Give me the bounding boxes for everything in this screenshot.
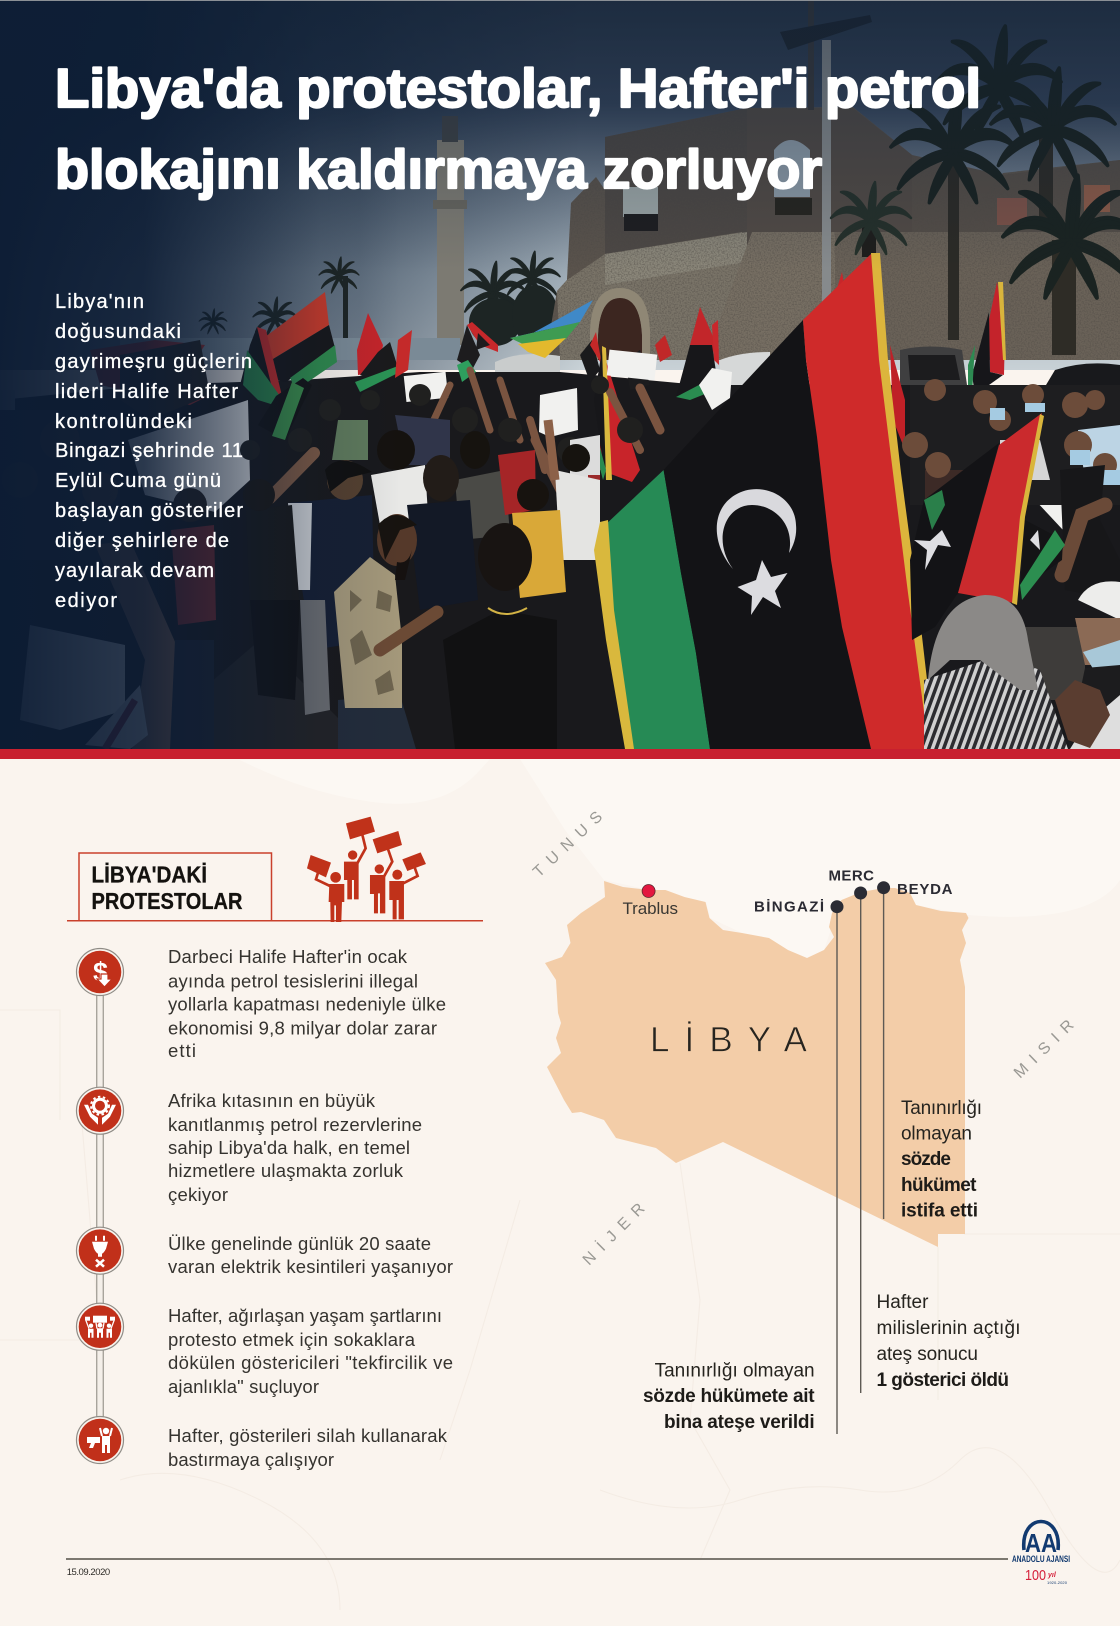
footer line — [66, 1558, 1008, 1560]
icon: small protesters — [76, 1303, 124, 1350]
city: Trablus: Trablus — [622, 899, 678, 918]
hero photo: protest in Tripoli — [0, 0, 1120, 749]
flag black band — [664, 320, 871, 749]
gray shirt man — [455, 470, 510, 540]
list item 1: oil closure loss: yollarla kapatması nedeniyle ülke — [168, 994, 446, 1014]
callout: government resigned: sözde — [901, 1149, 951, 1170]
black shirt small — [246, 505, 300, 610]
list item 3: power cuts: Ülke genelinde günlük 20 saate — [168, 1233, 431, 1254]
section heading: Libya'daki protestolar: LİBYA'DAKİ — [92, 862, 207, 888]
callout: building set on fire: sözde hükümete ait — [643, 1386, 815, 1407]
callout: one protester died: 1 gösterici öldü — [876, 1370, 1009, 1391]
icon: gun and person — [76, 1416, 124, 1464]
rear red flag corner — [830, 272, 850, 330]
camo man — [338, 695, 416, 749]
background flags, left group — [90, 292, 337, 440]
label: Libya: LİBYA — [650, 1021, 808, 1060]
main libyan flag — [594, 253, 935, 749]
section heading: Libya'daki protestolar: PROTESTOLAR — [92, 888, 243, 914]
list item 4: accusations: ajanlıkla" suçluyor — [168, 1376, 319, 1397]
section heading: Libya'daki protestolar — [67, 853, 483, 921]
list item 2: oil reserves: kanıtlanmış petrol rezervlerine — [168, 1114, 422, 1135]
lead paragraph: diğer şehirlere de — [55, 530, 229, 552]
lead paragraph: yayılarak devam — [55, 560, 214, 582]
icon: dollar falling — [76, 948, 124, 996]
icon: plug — [76, 1227, 124, 1274]
pointer line: Beyda: BEYDA — [897, 881, 953, 898]
cars — [495, 346, 1120, 395]
callout: government resigned: hükümet — [901, 1175, 977, 1196]
list item 3: power cuts: varan elektrik kesintileri yaşanıyor — [168, 1256, 453, 1277]
background palms, horizon — [120, 251, 560, 360]
logo: Anadolu Ajansi: ANADOLU AJANSI — [1012, 1554, 1070, 1564]
right arm — [1062, 505, 1105, 575]
icon: dollar falling: $ — [93, 957, 108, 987]
legs — [300, 600, 330, 715]
lead paragraph: kontrolündeki — [55, 411, 192, 433]
list item 2: oil reserves: çekiyor — [168, 1184, 228, 1205]
ground — [1024, 627, 1085, 700]
man in white cap — [1055, 581, 1120, 749]
white shirt man — [371, 465, 428, 525]
callout: one protester died — [876, 1292, 1020, 1391]
callout: building set on fire — [643, 1361, 815, 1433]
flags, castle side — [676, 282, 1006, 400]
list item 4: accusations: protesto etmek için sokaklara — [168, 1329, 416, 1350]
list item 4: accusations: dökülen göstericileri "tekfircilik ve — [168, 1352, 453, 1373]
list item 1: oil closure loss: etti — [168, 1040, 196, 1061]
dark polo — [407, 500, 478, 610]
castle arch door — [598, 298, 642, 360]
flag crescent — [717, 489, 796, 569]
list item 2: oil reserves: hizmetlere ulaşmakta zorluk — [168, 1160, 404, 1181]
list item 1: oil closure loss: Darbeci Halife Hafter'in ocak — [168, 946, 408, 967]
left foreground, white shirt and arm — [20, 625, 125, 730]
callout: one protester died: milislerinin açtığı — [876, 1318, 1020, 1339]
lead paragraph — [55, 291, 252, 612]
logo: Anadolu Ajansi: 100 — [1025, 1567, 1046, 1584]
icon: gear in hands — [76, 1087, 124, 1134]
flag green band — [603, 470, 710, 749]
map of Libya — [530, 808, 1077, 1434]
title — [55, 57, 981, 200]
protesters, front — [20, 420, 600, 749]
callout: building set on fire: Tanınırlığı olmayan — [655, 1361, 815, 1382]
callout: government resigned: olmayan — [901, 1123, 972, 1144]
callout: government resigned — [901, 1098, 982, 1222]
callout: government resigned: istifa etti — [901, 1201, 978, 1222]
pointer line: Merc — [828, 868, 874, 1393]
logo: Anadolu Ajansi — [1012, 1522, 1070, 1585]
callout: building set on fire: bina ateşe verildi — [664, 1412, 815, 1433]
country label: Tunus: TUNUS — [530, 808, 606, 881]
icon: protesters with placards — [307, 817, 426, 922]
lead paragraph: doğusundaki — [55, 321, 181, 343]
right crowd — [902, 379, 1120, 600]
timeline connector — [97, 990, 103, 1430]
lead paragraph: Eylül Cuma günü — [55, 470, 221, 492]
title: blokajını kaldırmaya zorluyor — [55, 138, 822, 200]
white shirt raised arm — [555, 470, 600, 560]
list item 2: oil reserves — [76, 1087, 422, 1205]
pointer line: Bingazi — [754, 899, 844, 1434]
navy shirt with cap — [288, 495, 375, 650]
castle windows right — [997, 198, 1027, 225]
yellow shirt — [512, 510, 566, 598]
list item 1: oil closure loss: ayında petrol tesislerini illegal — [168, 970, 418, 992]
list item 1: oil closure loss — [76, 946, 446, 1061]
list item 3: power cuts — [76, 1227, 453, 1277]
centre flags — [355, 300, 672, 392]
logo: Anadolu Ajansi: AA — [1025, 1528, 1057, 1558]
country label: Nijer: NİJER — [578, 1199, 648, 1269]
light pole — [780, 0, 872, 310]
libya outline — [545, 881, 968, 1247]
medium flag with fringe — [594, 346, 640, 482]
lead paragraph: gayrimeşru güçlerin — [55, 351, 252, 373]
black shirt foreground — [443, 610, 557, 749]
lead paragraph: başlayan gösteriler — [55, 500, 243, 522]
left white banner — [128, 400, 250, 512]
list item 4: accusations — [76, 1303, 453, 1397]
logo: Anadolu Ajansi: 1920-2020 — [1047, 1580, 1068, 1585]
castle — [540, 100, 1120, 362]
list item 2: oil reserves: sahip Libya'da halk, en temel — [168, 1137, 410, 1158]
sky — [0, 0, 1120, 370]
red divider bar — [0, 749, 1120, 759]
crowd top heads and arms — [0, 370, 660, 560]
list item 1: oil closure loss: ekonomisi 9,8 milyar dolar zarar — [168, 1018, 437, 1038]
callout: one protester died: Hafter — [876, 1292, 929, 1313]
callout: government resigned: Tanınırlığı — [901, 1098, 982, 1119]
lead paragraph: Libya'nın — [55, 291, 144, 313]
list item 5: armed suppression — [76, 1416, 448, 1470]
flag red band — [803, 253, 931, 749]
title: Libya'da protestolar, Hafter'i petrol — [55, 57, 981, 119]
list item 2: oil reserves: Afrika kıtasının en büyük — [168, 1090, 376, 1111]
list item 5: armed suppression: bastırmaya çalışıyor — [168, 1449, 334, 1470]
photo overlays — [0, 0, 400, 749]
footer date: 15.09.2020 — [67, 1567, 110, 1578]
list item 4: accusations: Hafter, ağırlaşan yaşam şartlarını — [168, 1305, 442, 1326]
lead paragraph: lideri Halife Hafter — [55, 381, 238, 403]
dark red shirt, back — [498, 450, 536, 515]
callout: one protester died: ateş sonucu — [876, 1344, 978, 1365]
flag star — [738, 560, 788, 615]
logo: Anadolu Ajansi: yıl — [1047, 1572, 1057, 1579]
crowd base — [0, 372, 1120, 749]
lead paragraph: ediyor — [55, 590, 117, 612]
pointer line: Merc: MERC — [828, 868, 874, 885]
white placards — [0, 350, 1090, 530]
second flag right — [910, 413, 1065, 640]
pointer line: Beyda — [877, 881, 953, 1219]
castle arch window — [774, 140, 810, 197]
old man with striped shirt — [924, 595, 1068, 749]
pointer line: Bingazi: BİNGAZİ — [754, 899, 824, 916]
castle window left — [623, 187, 658, 217]
lead paragraph: Bingazi şehrinde 11 — [55, 440, 243, 462]
country label: Misir: MISIR — [1011, 1017, 1077, 1082]
palms right — [831, 26, 1120, 355]
monument column — [433, 116, 467, 345]
flag gold fringe — [871, 253, 935, 749]
red shirt dim — [171, 525, 216, 625]
list item 5: armed suppression: Hafter, gösterileri silah kullanarak — [168, 1425, 448, 1446]
city: Trablus — [622, 884, 678, 918]
